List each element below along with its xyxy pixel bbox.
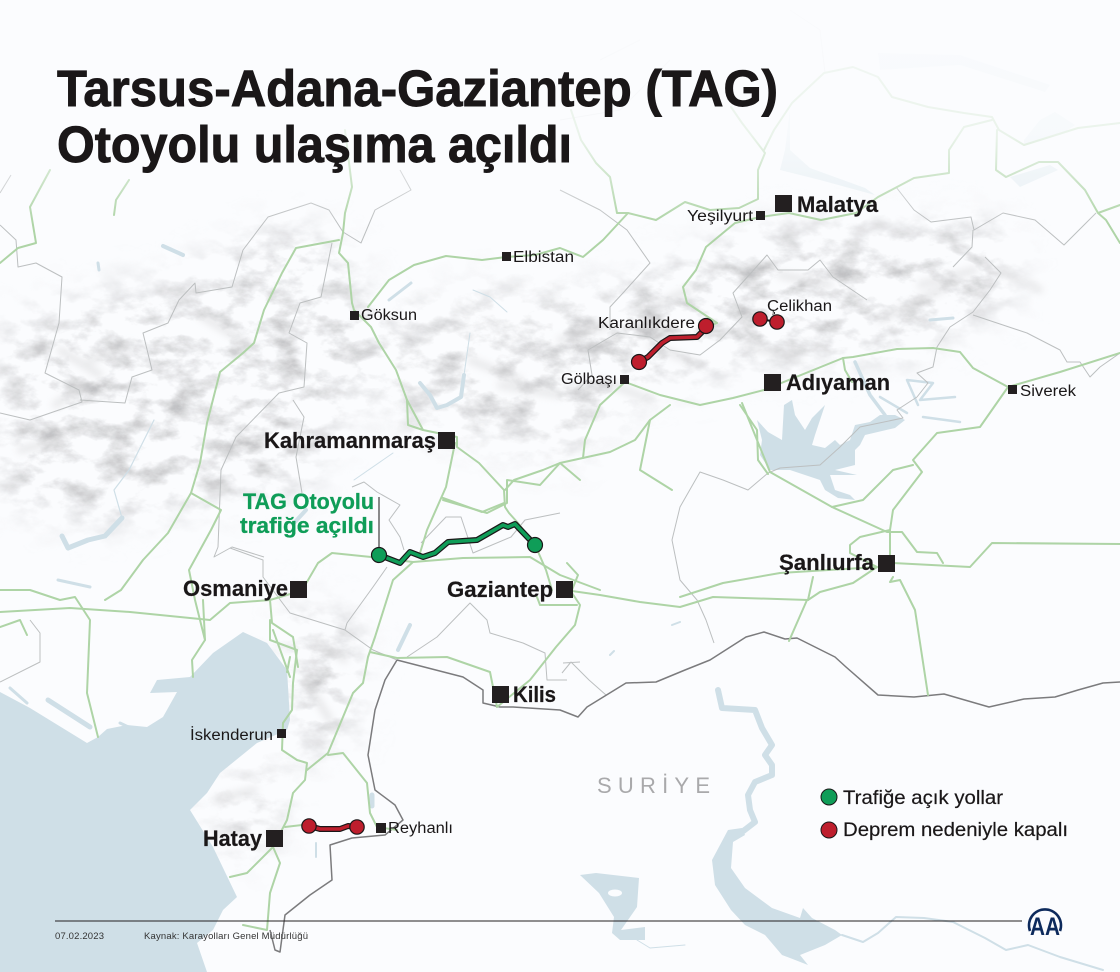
city: Hatay: Hatay xyxy=(203,826,262,851)
Atatürk dam lake xyxy=(757,400,905,500)
Euphrates river lake xyxy=(712,828,842,965)
callout: TAG Otoyolu: trafiğe açıldı xyxy=(240,513,374,538)
legend item: closed roads: Deprem nedeniyle kapalı xyxy=(843,819,1068,841)
faded top of map xyxy=(0,0,1120,225)
city: Reyhanlı: Reyhanlı xyxy=(388,820,453,837)
faint northern lakes xyxy=(780,53,1075,195)
city: Malatya: Malatya xyxy=(797,192,878,217)
callout: TAG Otoyolu xyxy=(240,489,379,548)
island in southern lake xyxy=(608,890,622,896)
route: Hatay closed road xyxy=(302,819,364,834)
legend item: open roads: Trafiğe açık yollar xyxy=(843,787,1004,809)
country label: Suriye: SURİYE xyxy=(597,773,710,798)
province borders xyxy=(0,10,1120,695)
city: Şanlıurfa: Şanlıurfa xyxy=(779,550,874,575)
label: Çelikhan: Çelikhan xyxy=(767,298,832,315)
title xyxy=(57,60,778,173)
label: Karanlıkdere: Karanlıkdere xyxy=(598,315,695,332)
city: Kilis xyxy=(492,682,556,707)
national border with Syria xyxy=(270,632,1120,952)
route: Karanlıkdere closed road xyxy=(632,318,714,370)
city: Yeşilyurt: Yeşilyurt xyxy=(687,208,754,225)
callout: TAG Otoyolu: TAG Otoyolu xyxy=(243,489,374,514)
route: Çelikhan closed road xyxy=(753,312,784,329)
title: Otoyolu ulaşıma açıldı xyxy=(57,116,572,173)
city: İskenderun: İskenderun xyxy=(190,726,273,744)
southern lake xyxy=(580,873,645,940)
city: Adıyaman: Adıyaman xyxy=(786,370,890,395)
logo: AA: AA xyxy=(1030,913,1060,941)
city: Gaziantep: Gaziantep xyxy=(447,577,553,602)
city: Gölbaşı: Gölbaşı xyxy=(561,371,617,388)
date: 07.02.2023 xyxy=(55,931,104,942)
city: Kilis: Kilis xyxy=(513,682,556,707)
source: Kaynak: Karayolları Genel Müdürlüğü xyxy=(144,931,308,942)
city: Siverek: Siverek xyxy=(1020,383,1076,400)
city: Kahramanmaraş: Kahramanmaraş xyxy=(264,428,436,453)
footer xyxy=(55,921,1022,942)
river lines xyxy=(10,246,1103,970)
sea xyxy=(0,632,290,972)
city: Elbistan: Elbistan xyxy=(513,249,574,266)
city: Göksun: Göksun xyxy=(361,307,417,324)
route: TAG motorway open to traffic xyxy=(372,524,542,563)
title: Tarsus-Adana-Gaziantep (TAG) xyxy=(57,60,778,117)
city: Osmaniye: Osmaniye xyxy=(183,576,288,601)
hillshade terrain xyxy=(0,225,1040,850)
legend xyxy=(821,787,1068,841)
